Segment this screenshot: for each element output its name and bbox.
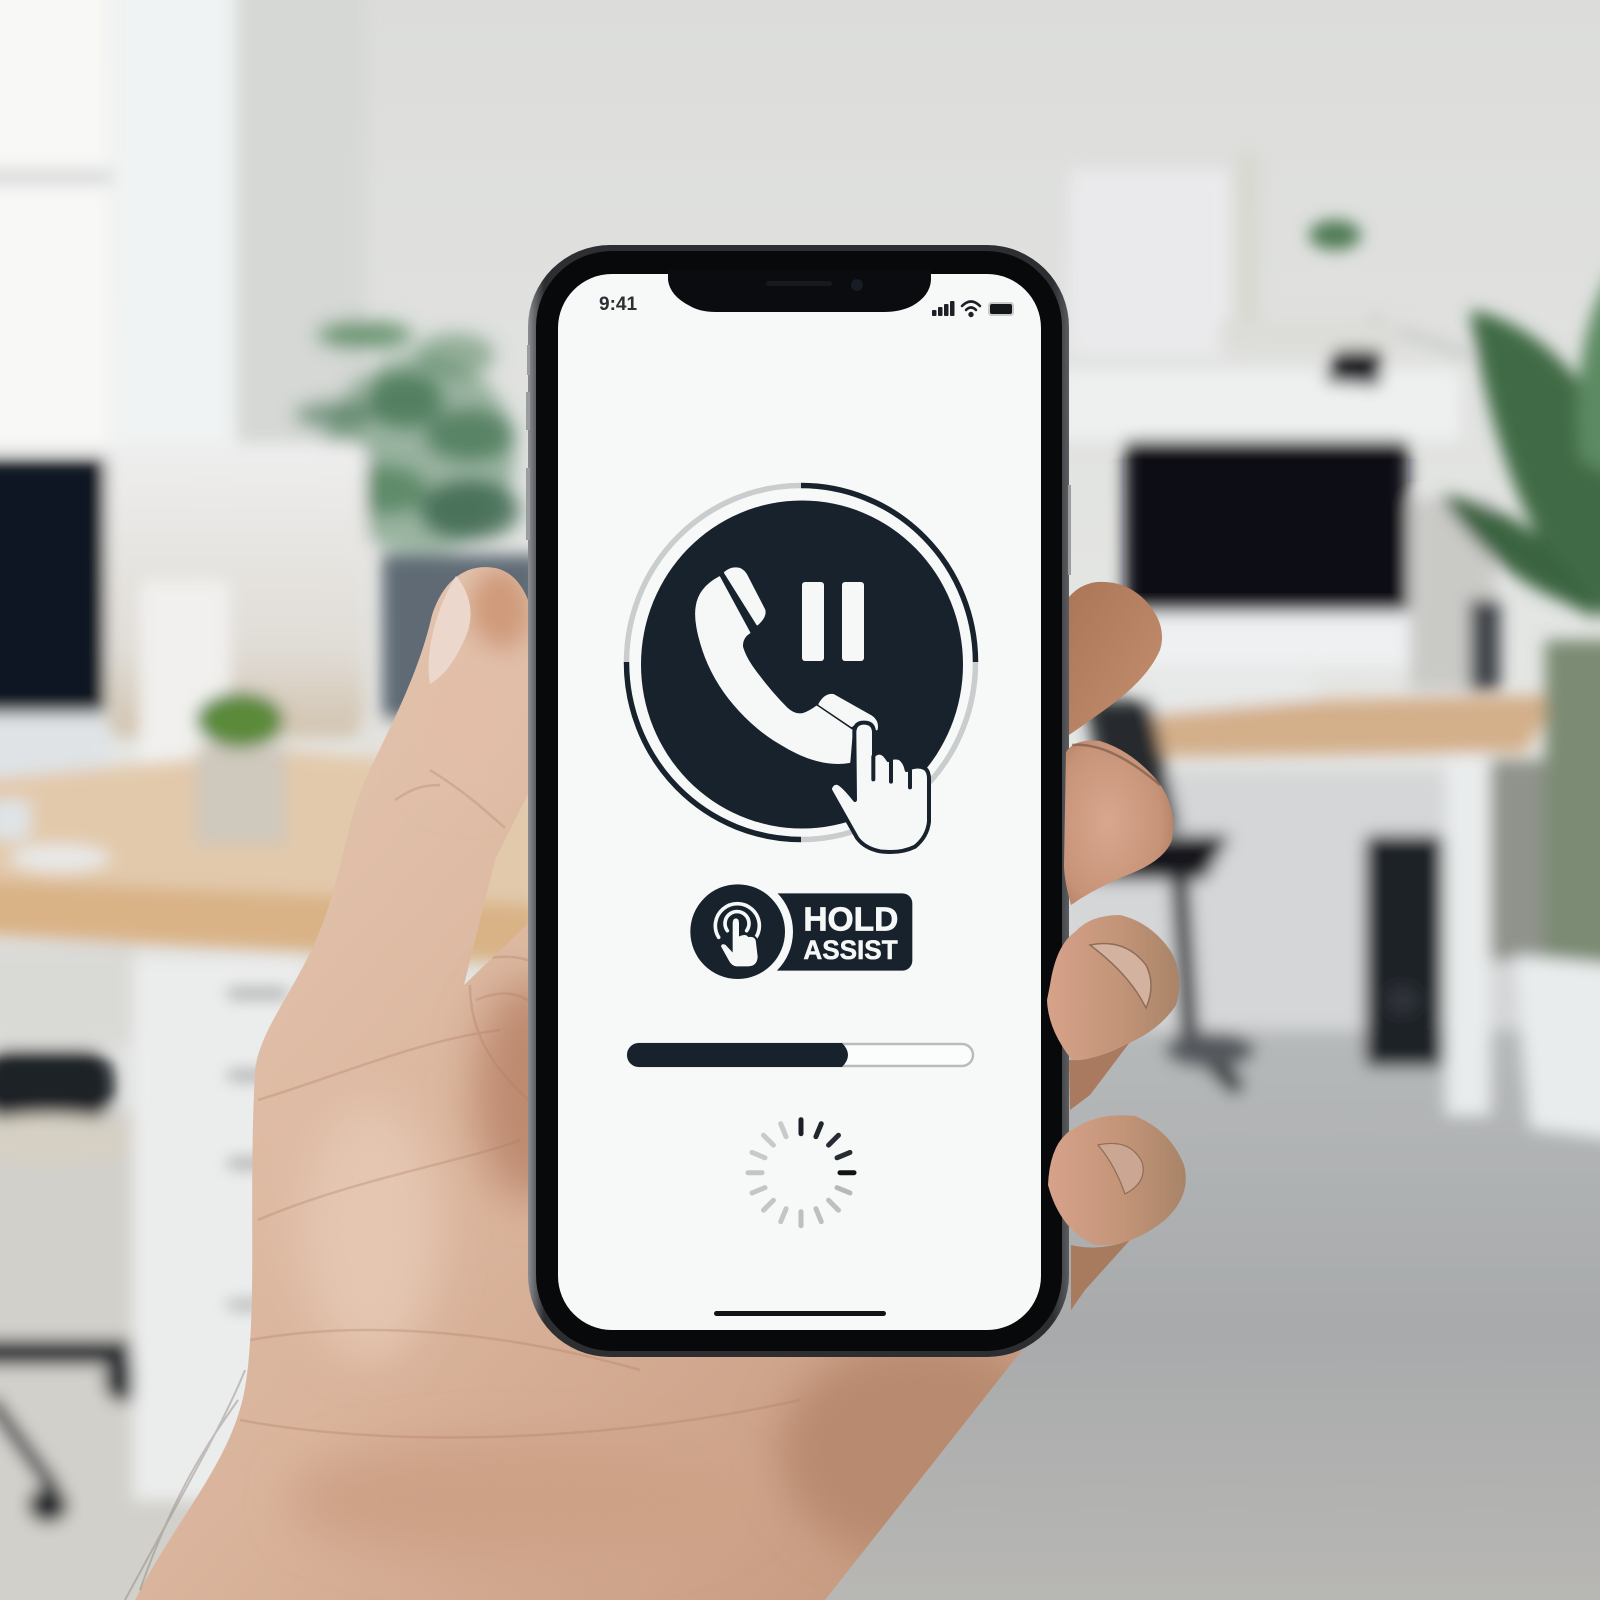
home indicator <box>714 1311 886 1316</box>
background: drawer unit <box>133 960 303 1500</box>
phone: screen <box>558 274 1041 1330</box>
background: right desk <box>1150 695 1560 1115</box>
main icon: pause bars <box>802 582 864 661</box>
background: right wall and floor <box>780 370 1600 1600</box>
background: office chair <box>1085 700 1255 1090</box>
progress bar <box>627 1043 973 1067</box>
status bar: time: 9:41 <box>599 294 637 315</box>
background: window and pillar <box>0 0 366 450</box>
background: right monitor <box>1125 440 1500 718</box>
badge: ASSIST label: ASSIST <box>803 935 898 965</box>
hand: wrist hair <box>125 1370 245 1600</box>
hand: palm and thumb <box>125 567 1060 1600</box>
badge: label pill <box>767 893 912 971</box>
main icon: pointing hand <box>830 723 929 852</box>
main icon: phone on hold <box>626 486 976 852</box>
progress bar: fill <box>627 1043 848 1067</box>
badge: white gap ring <box>682 876 793 987</box>
background: shelf plant and lamp <box>1220 220 1470 386</box>
main icon: handset <box>696 568 877 763</box>
status bar: signal <box>932 301 954 316</box>
background: PC tower <box>1365 835 1443 1067</box>
finger 4 <box>1048 1115 1186 1310</box>
fingers on right of phone <box>1047 582 1186 1310</box>
badge: dark circle <box>690 884 785 979</box>
background: left monitor <box>0 459 110 778</box>
background: wall poster <box>1070 152 1260 355</box>
badge: HOLD label: HOLD <box>803 901 898 938</box>
background: left chair <box>0 1050 140 1523</box>
background: left desk <box>0 750 540 1045</box>
hand: thumbnail <box>429 576 471 684</box>
finger 1 <box>1069 582 1162 735</box>
phone body <box>526 245 1071 1357</box>
background: plant behind phone <box>295 321 520 555</box>
status bar: battery <box>988 302 1014 316</box>
background: gray chair <box>382 555 542 745</box>
main icon: dark disc <box>641 500 963 828</box>
hand: shading and creases <box>240 568 1060 1560</box>
phone: notch <box>668 270 931 312</box>
background: white monitor back <box>108 443 366 738</box>
hold assist badge <box>682 876 912 987</box>
finger 3: nail <box>1090 944 1151 1008</box>
background: left floor <box>0 1110 270 1600</box>
finger 2 <box>1064 740 1173 905</box>
main icon: progress ring <box>626 486 976 840</box>
loading spinner <box>748 1120 854 1226</box>
finger 4: nail <box>1098 1143 1143 1194</box>
background: big plant <box>1440 260 1600 1140</box>
badge: touch rings <box>715 904 759 937</box>
phone: side buttons <box>526 345 1071 575</box>
badge: hand glyph <box>720 917 759 967</box>
status bar: wifi <box>962 302 980 316</box>
background: tan strip and white stand <box>140 580 460 770</box>
finger 3 <box>1047 915 1179 1110</box>
background: small desk plant <box>196 692 286 845</box>
